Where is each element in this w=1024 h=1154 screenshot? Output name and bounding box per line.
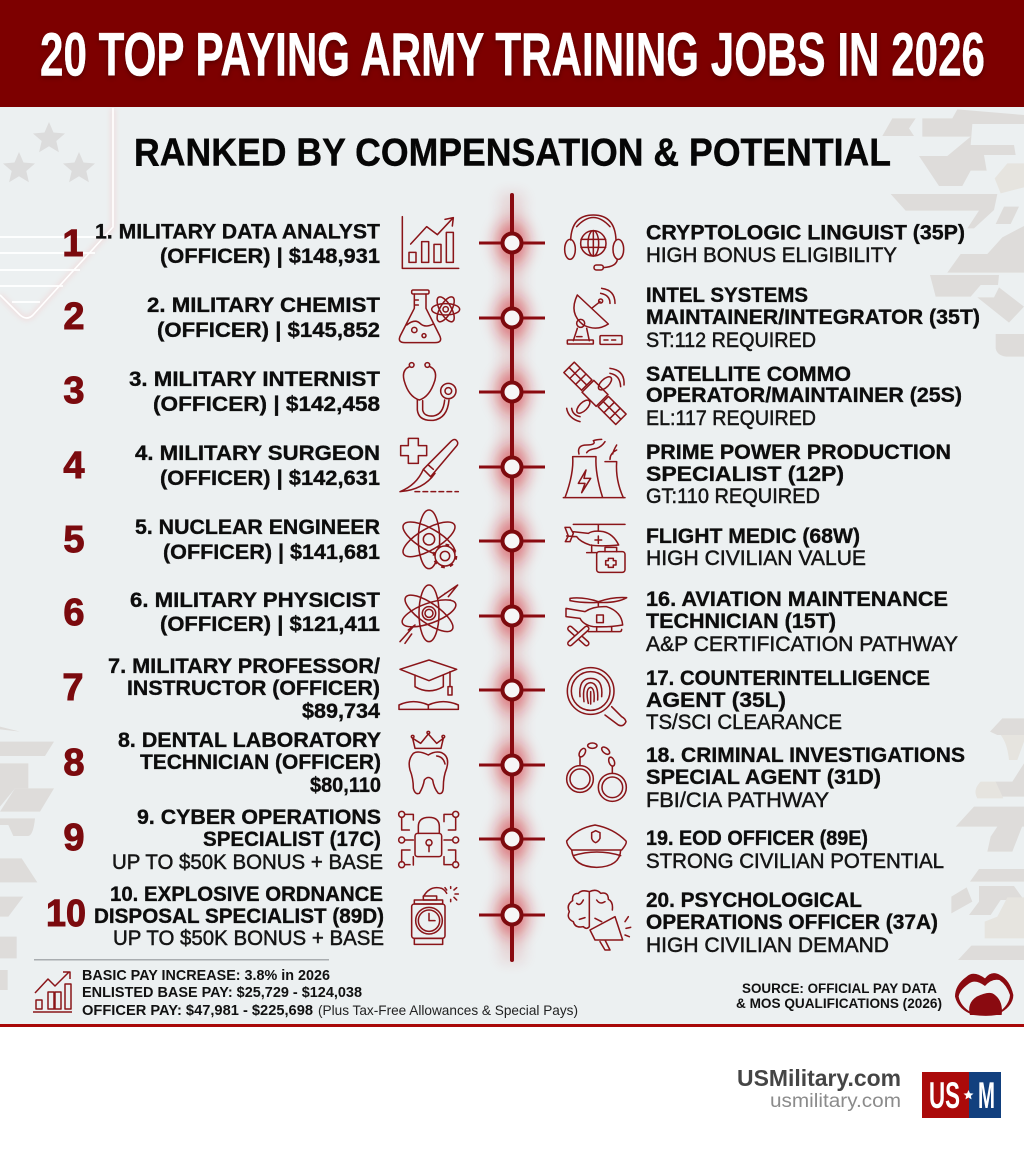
icon: tooth with crown [409,731,448,794]
rank numbers: 4 [63,445,85,487]
icon: graduation cap and book [399,660,458,709]
job 13 [646,362,962,430]
job 9: 9. CYBER OPERATIONS [137,805,381,829]
icon: officer cap [567,825,626,867]
job 9: UP TO $50K BONUS + BASE [112,850,383,874]
icon: flask and atom [399,290,460,343]
icons group: rows 8-10 [399,707,631,950]
job 17 [646,666,930,734]
job 15: FLIGHT MEDIC (68W) [646,524,860,548]
job 10 [94,882,384,950]
job 11 [646,220,965,267]
timeline spine with nodes [479,193,545,962]
icon: helicopter and tools [566,597,627,647]
left column job text [94,220,384,950]
icon: footer pay chart [33,972,72,1012]
job 12 [646,283,980,352]
rank numbers: 3 [63,370,85,412]
footer divider [34,959,329,960]
job 7: $89,734 [302,699,380,723]
job 6: 6. MILITARY PHYSICIST [130,588,380,612]
job 12: INTEL SYSTEMS [646,283,808,307]
job 8: 8. DENTAL LABORATORY [118,728,381,752]
icon: medical cross and scalpel [400,438,458,492]
brand text: USMilitary.com [737,1065,901,1091]
job 2: (OFFICER) | $145,852 [157,318,380,342]
job 3: (OFFICER) | $142,458 [153,392,380,416]
job 20: HIGH CIVILIAN DEMAND [646,933,889,957]
job 2: 2. MILITARY CHEMIST [147,293,380,317]
job 16: 16. AVIATION MAINTENANCE [646,587,948,611]
job 19: STRONG CIVILIAN POTENTIAL [646,849,944,873]
header band [0,0,1024,107]
icon: satellite [563,362,627,425]
logo: US star M: US [929,1075,960,1116]
job 14: PRIME POWER PRODUCTION [646,440,951,464]
icon: power plant [563,439,625,498]
rank numbers: 8 [63,742,85,784]
job 12: ST:112 REQUIRED [646,328,816,352]
footer pay facts: (Plus Tax-Free Allowances & Special Pays) [318,1002,578,1018]
job 8: $80,110 [310,773,381,797]
footer pay facts [82,967,578,1019]
rank numbers: 2 [63,296,85,338]
icon: brain with megaphone [568,890,631,950]
job 14: GT:110 REQUIRED [646,484,820,508]
job 13: EL:117 REQUIRED [646,406,816,430]
job 17: TS/SCI CLEARANCE [646,710,842,734]
job 5 [135,515,380,564]
job 1 [95,220,380,268]
logo: US star M: M [978,1075,995,1116]
job 9: SPECIALIST (17C) [203,827,381,851]
decorative camouflage shapes bottom left [0,727,54,990]
brand text [737,1065,901,1112]
job 15 [646,524,866,570]
rank numbers: 10 [46,893,86,935]
magnifier handle [605,707,626,726]
job 16: TECHNICIAN (15T) [646,609,836,633]
footer pay facts: OFFICER PAY: $47,981 - $225,698 [82,1002,313,1019]
decorative camouflage shapes bottom right [951,718,1024,960]
source note [736,981,942,1011]
job 4 [135,441,380,490]
job 17: AGENT (35L) [646,688,786,712]
icon: medical helicopter and kit [565,524,625,572]
job 4: (OFFICER) | $142,631 [160,466,380,490]
icon: stethoscope [403,363,456,420]
footer pay facts: BASIC PAY INCREASE: 3.8% in 2026 [82,967,330,984]
footer pay facts: ENLISTED BASE PAY: $25,729 - $124,038 [82,984,362,1001]
page background [0,107,1024,1024]
icon: nuclear atom and gear [398,510,460,569]
job 7: INSTRUCTOR (OFFICER) [127,676,380,700]
job 12: MAINTAINER/INTEGRATOR (35T) [646,305,980,329]
job 6: (OFFICER) | $121,411 [160,612,380,636]
job 18: FBI/CIA PATHWAY [646,788,829,812]
rank numbers: 9 [63,817,85,859]
job 14: SPECIALIST (12P) [646,462,844,486]
icon: handcuffs [567,743,626,801]
job 5: (OFFICER) | $141,681 [163,540,380,564]
logo: US star M [922,1072,1001,1118]
job 16 [646,587,958,656]
decorative camouflage shapes top right [882,109,1024,357]
icons group: rows 1-3 [399,215,627,425]
job 10: UP TO $50K BONUS + BASE [113,926,384,950]
job 10: 10. EXPLOSIVE ORDNANCE [110,882,383,906]
job 10: DISPOSAL SPECIALIST (89D) [94,904,384,928]
icon: magnifier with fingerprint [567,668,614,714]
job 3: 3. MILITARY INTERNIST [129,367,380,391]
job 6 [130,588,380,636]
job 20 [646,888,938,957]
job 14 [646,440,951,508]
job 8 [118,728,381,797]
source note: & MOS QUALIFICATIONS (2026) [736,996,942,1011]
subtitle: RANKED BY COMPENSATION & POTENTIAL [134,132,891,174]
job 7 [108,654,380,723]
job 7: 7. MILITARY PROFESSOR/ [108,654,380,678]
decorative shield with stars [0,108,113,318]
rank numbers [46,223,86,935]
job 3 [129,367,380,416]
job 15: HIGH CIVILIAN VALUE [646,546,866,570]
icon: headset with globe [565,215,624,270]
job 4: 4. MILITARY SURGEON [135,441,380,465]
job 18: 18. CRIMINAL INVESTIGATIONS [646,743,965,767]
job 2 [147,293,380,342]
job 19: 19. EOD OFFICER (89E) [646,826,868,850]
rank numbers: 1 [62,223,84,265]
job 20: 20. PSYCHOLOGICAL [646,888,862,912]
job 20: OPERATIONS OFFICER (37A) [646,910,938,934]
icon: padlock with circuits [399,811,459,868]
rank numbers: 5 [63,519,85,561]
icons group: rows 4-7 [398,438,627,714]
job 1: (OFFICER) | $148,931 [160,244,380,268]
icon: source emblem [955,973,1013,1016]
job 11: HIGH BONUS ELIGIBILITY [646,243,897,267]
icon: satellite dish [567,288,622,344]
icon: physics atom with particle trails [399,585,459,643]
job 9 [112,805,383,874]
right column job text [646,220,980,957]
icon: rising bar chart [402,217,459,268]
job 16: A&P CERTIFICATION PATHWAY [646,632,958,656]
job 19 [646,826,944,873]
bottom red rule [0,1024,1024,1027]
rank numbers: 7 [62,667,84,709]
white footer band [0,1027,1024,1154]
brand text: usmilitary.com [770,1091,901,1112]
job 13: SATELLITE COMMO [646,362,851,386]
job 8: TECHNICIAN (OFFICER) [140,750,381,774]
job 11: CRYPTOLOGIC LINGUIST (35P) [646,220,965,244]
source note: SOURCE: OFFICIAL PAY DATA [742,981,937,996]
job 1: 1. MILITARY DATA ANALYST [95,220,380,244]
icon: time bomb [412,887,458,944]
job 18: SPECIAL AGENT (31D) [646,765,881,789]
job 17: 17. COUNTERINTELLIGENCE [646,666,930,690]
job 13: OPERATOR/MAINTAINER (25S) [646,383,962,407]
rank numbers: 6 [63,592,85,634]
job 18 [646,743,965,812]
job 5: 5. NUCLEAR ENGINEER [135,515,380,539]
